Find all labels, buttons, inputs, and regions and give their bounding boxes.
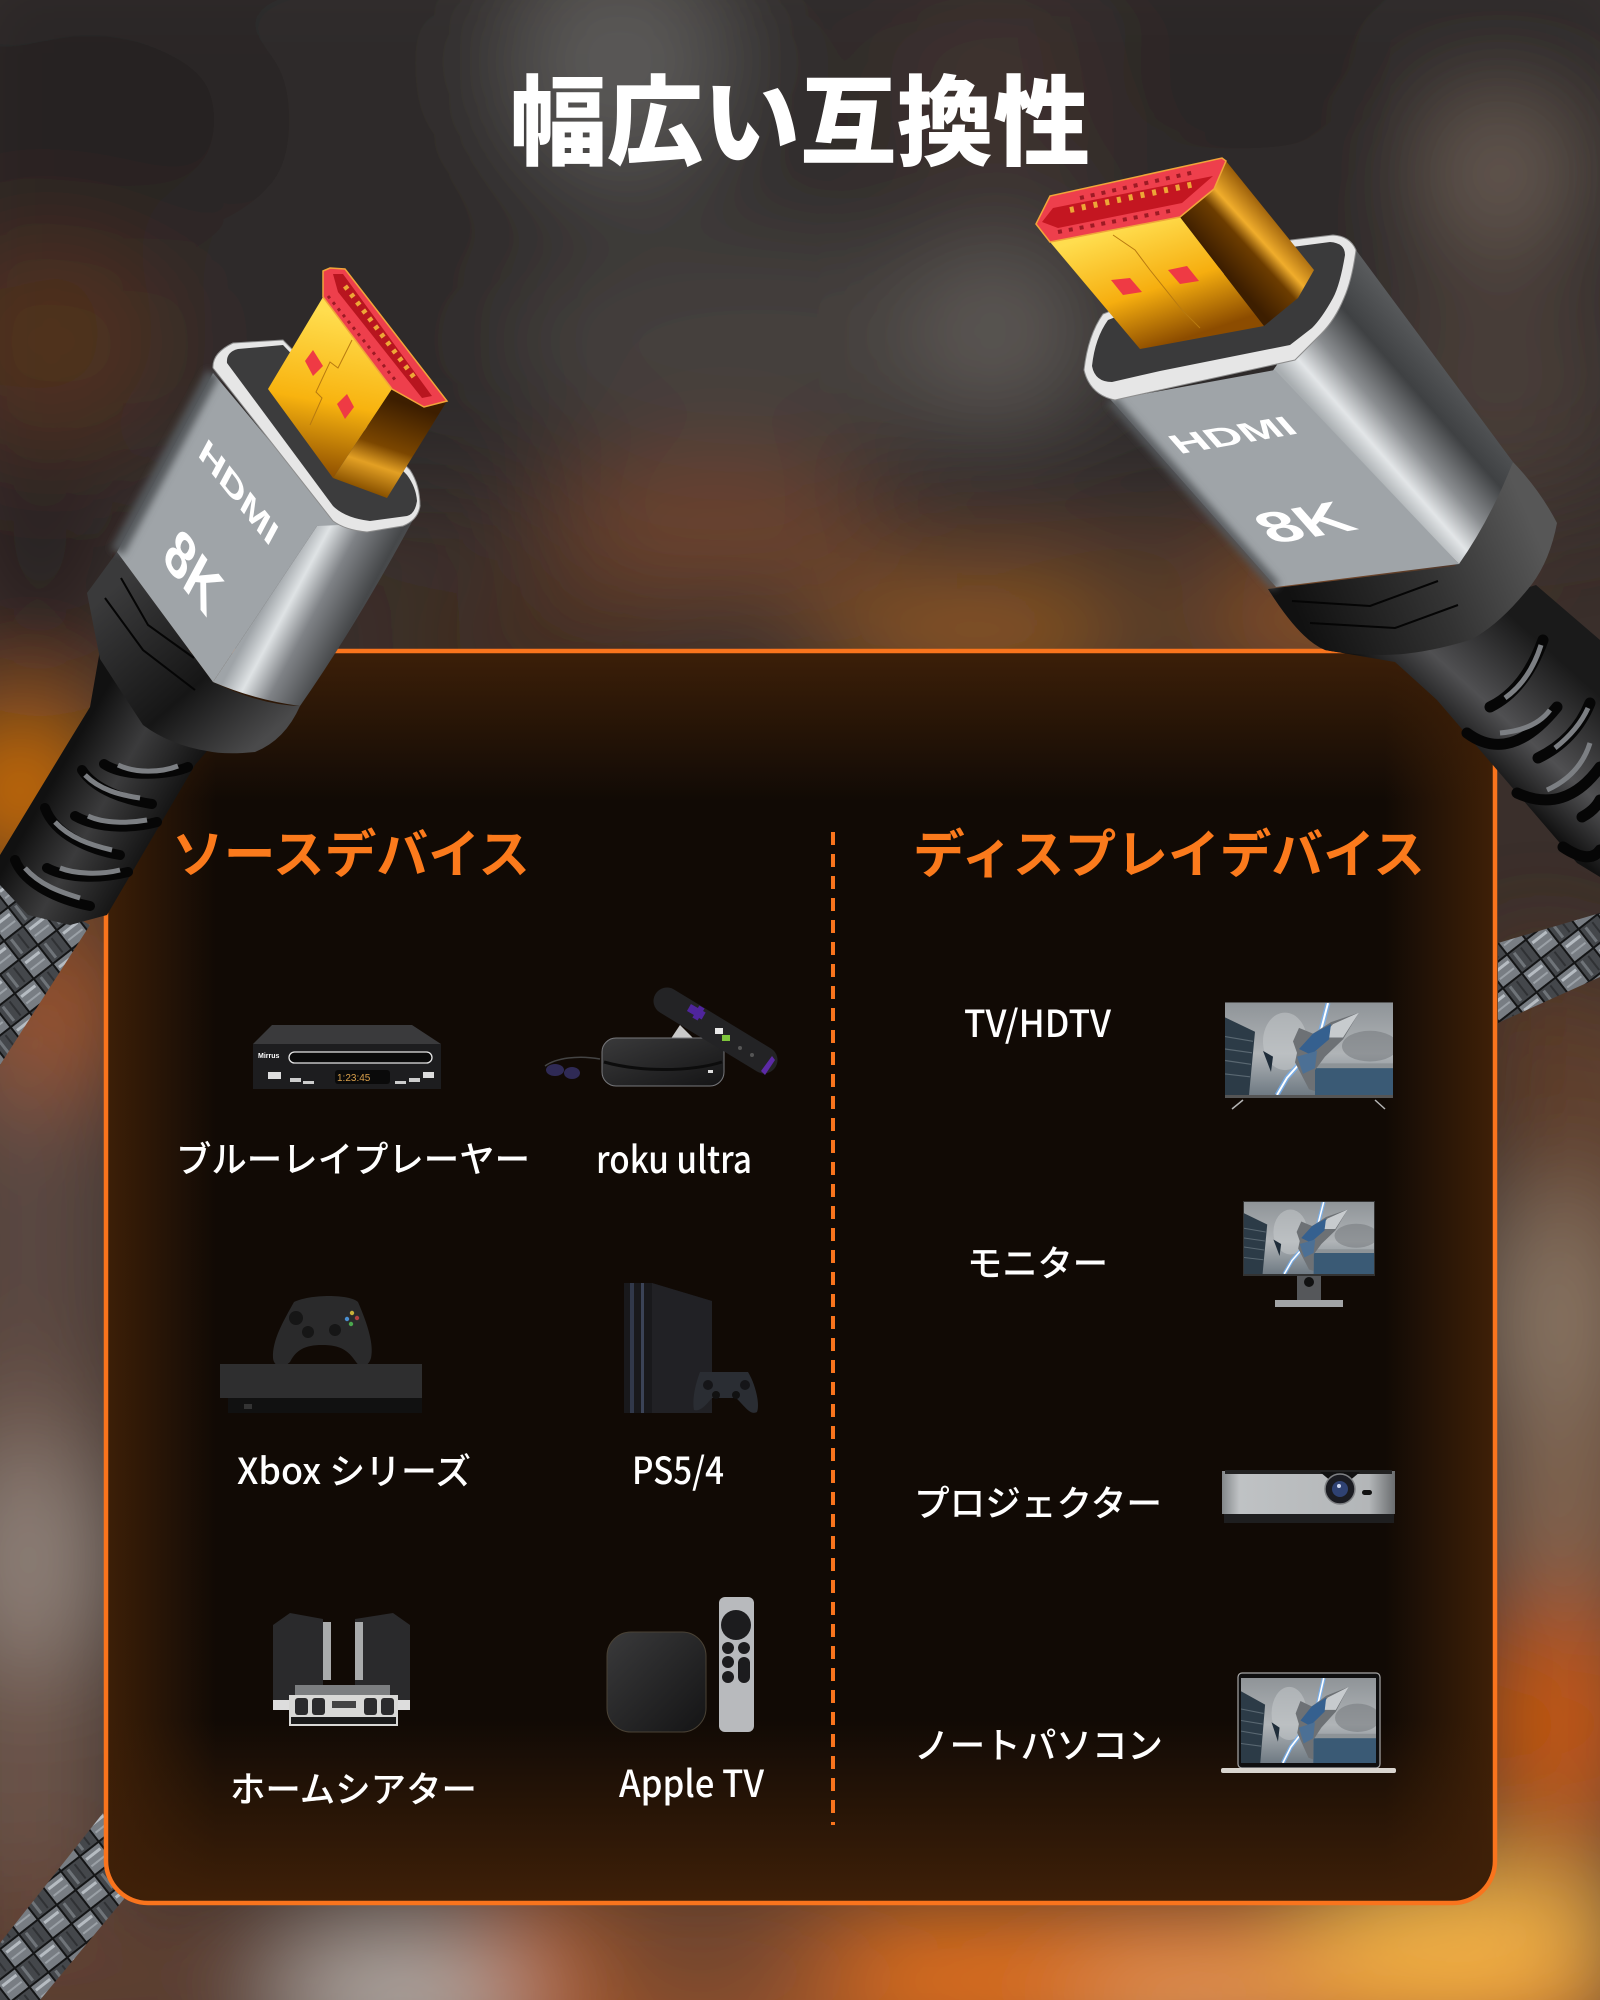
logo HDMI: HDMI [194,432,283,554]
rim [213,340,420,532]
label: home theater: ホームシアター [230,1761,477,1813]
column divider [831,832,835,1825]
icon: TV [1225,1002,1398,1109]
panel: device compatibility [106,651,1495,1903]
icon: apple tv [607,1597,754,1732]
label: projector: プロジェクター [914,1475,1162,1527]
boot with slits [0,650,207,925]
title: 幅広い互換性 [510,44,1090,186]
connector: left HDMI plug [0,268,447,925]
label: roku ultra: roku ultra [596,1130,752,1184]
heading: source devices: ソースデバイス [172,813,530,888]
cable: right braid [1498,913,1600,1023]
label: apple tv: Apple TV [619,1754,765,1808]
label: xbox series: Xbox シリーズ [237,1443,471,1495]
label: PS5/4: PS5/4 [632,1441,724,1495]
icon: projector [1222,1470,1395,1523]
heading: display devices: ディスプレイデバイス [913,813,1425,888]
icon: blu-ray player: 1:23:45 [337,1073,371,1084]
icon: xbox console with controller [220,1296,422,1413]
label: TV/HDTV: TV/HDTV [964,994,1112,1048]
logo 8K: 8K [1241,493,1368,553]
cable: left upper braid [0,875,90,1065]
label: monitor: モニター [967,1235,1108,1287]
metal shell top face [1111,370,1459,587]
cable: lower-left braid [0,1813,124,2000]
icon: monitor [1243,1201,1378,1307]
metal shell side [1272,250,1513,564]
icon: blu-ray player [253,1025,441,1089]
logo 8K: 8K [155,515,231,629]
icon: blu-ray player: Mirrus [258,1053,280,1060]
icon: home theater [273,1613,410,1726]
boot with slits [1325,585,1600,877]
rim [1084,235,1356,400]
icon: laptop [1221,1673,1396,1773]
label: blu-ray player: ブルーレイプレーヤー [176,1131,530,1183]
gold plug [1050,217,1264,349]
icon: playstation console with controller [624,1283,758,1413]
connector: right HDMI plug [1036,158,1600,877]
metal shell side [213,505,421,706]
label: laptop: ノートパソコン [914,1717,1163,1769]
strain relief [1268,462,1557,655]
logo HDMI: HDMI [1160,411,1305,459]
gold plug [268,297,392,478]
metal shell top face [117,373,340,682]
strain relief [87,552,300,753]
icon: roku ultra [545,1001,775,1086]
